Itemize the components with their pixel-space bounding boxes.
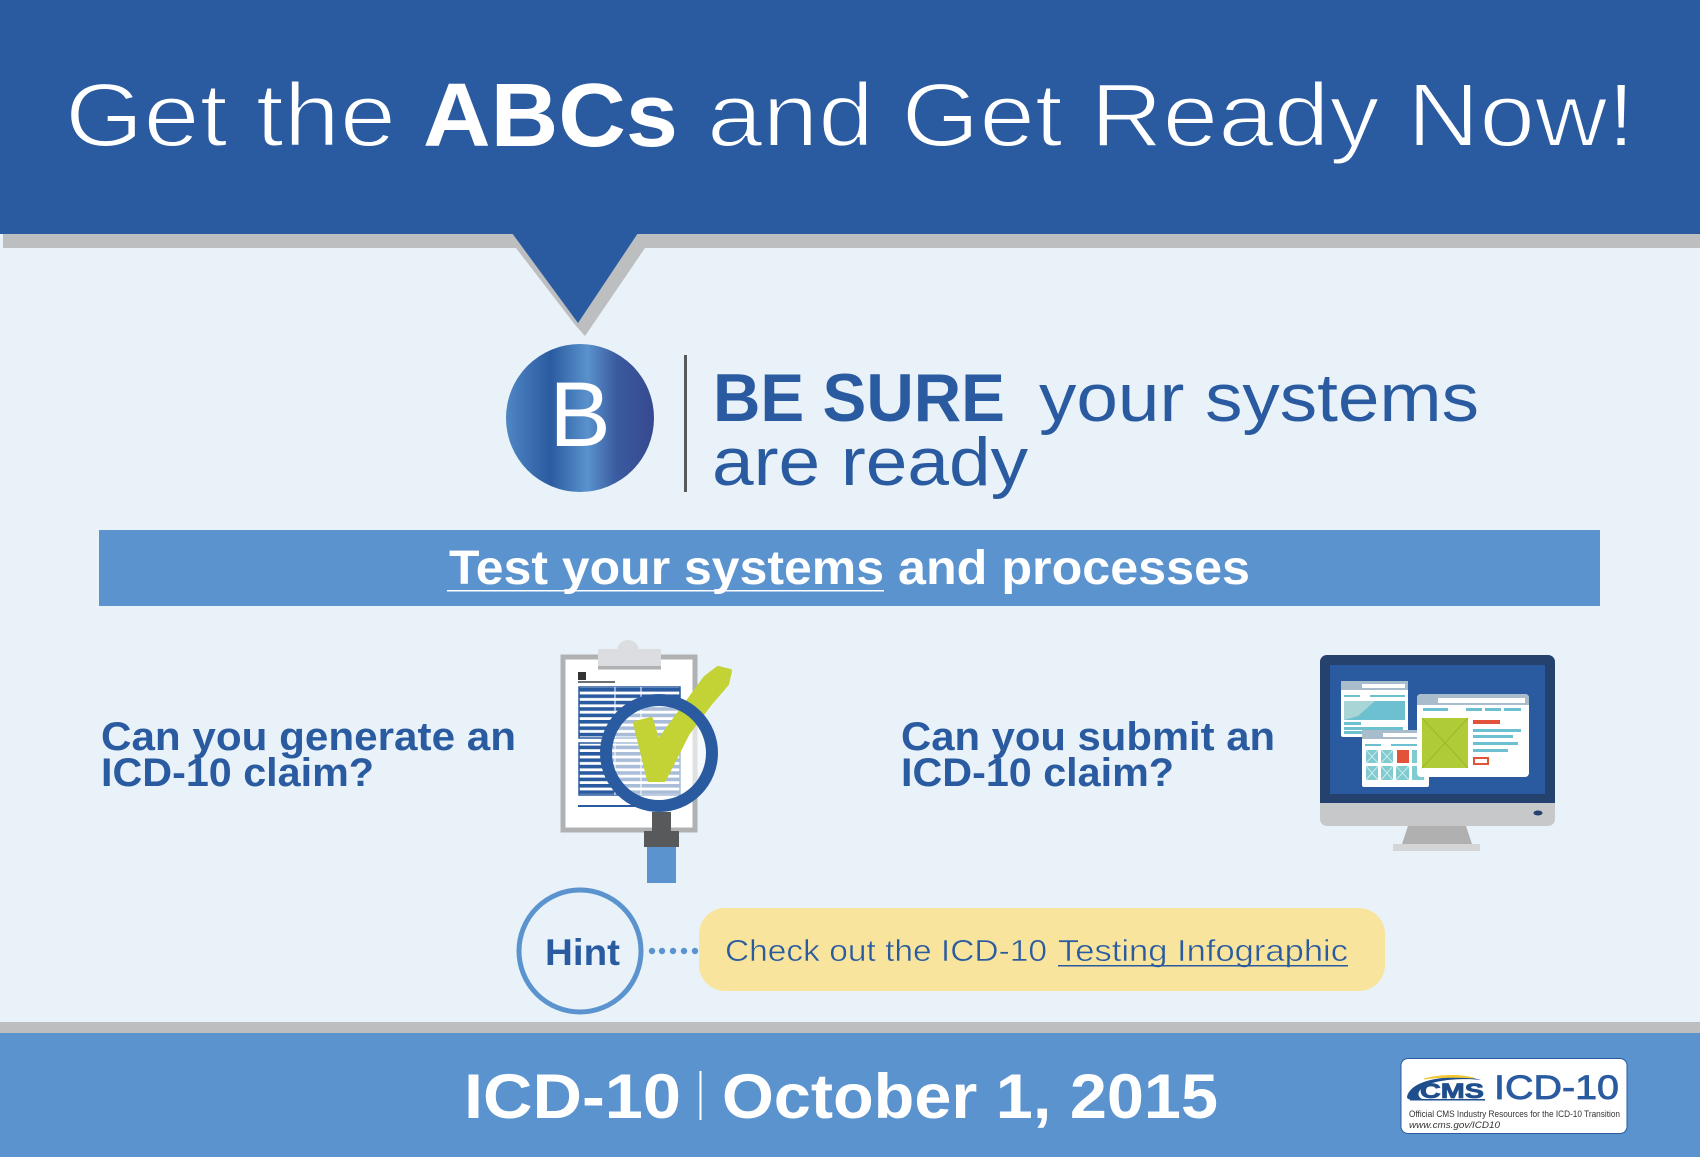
CMS ICD-10 logo: www.cms.gov/ICD10 bbox=[1409, 1120, 1500, 1130]
title: Get the bbox=[65, 66, 396, 166]
heading: be sure your systems are ready: are ready bbox=[712, 424, 1028, 500]
browser window three bbox=[1417, 694, 1529, 777]
hint callout bbox=[699, 908, 1385, 991]
heading: be sure your systems are ready: BE SURE bbox=[713, 360, 1005, 436]
title: and Get Ready Now! bbox=[707, 66, 1635, 166]
letter B badge bbox=[506, 344, 654, 492]
heading: be sure your systems are ready: your systems bbox=[1039, 360, 1479, 436]
divider line bbox=[684, 355, 687, 492]
test banner: and processes bbox=[898, 542, 1250, 595]
CMS ICD-10 logo bbox=[1401, 1058, 1627, 1134]
CMS ICD-10 logo: CMS bbox=[1420, 1080, 1484, 1103]
icon: clipboard with magnifier and check bbox=[563, 640, 730, 883]
hint callout: Testing Infographic bbox=[1058, 933, 1348, 968]
browser window one bbox=[1341, 681, 1408, 737]
footer date bbox=[464, 1062, 1218, 1132]
question: submit claim: Can you submit an bbox=[901, 715, 1275, 759]
title: ABCs bbox=[423, 66, 678, 166]
test banner bbox=[99, 530, 1600, 606]
header banner bbox=[0, 0, 1700, 336]
hint badge bbox=[519, 890, 641, 1012]
question: generate claim bbox=[101, 715, 516, 795]
footer banner bbox=[0, 1022, 1700, 1157]
test banner: Test your systems bbox=[449, 542, 884, 595]
question: submit claim bbox=[901, 715, 1275, 795]
hint callout: Check out the ICD-10 bbox=[725, 933, 1047, 968]
title bbox=[65, 66, 1635, 166]
dotted connector bbox=[649, 948, 698, 954]
icon: computer monitor bbox=[1320, 655, 1555, 851]
letter B badge: B bbox=[549, 364, 611, 466]
question: generate claim: Can you generate an bbox=[101, 715, 516, 759]
CMS ICD-10 logo: ICD-10 bbox=[1494, 1069, 1619, 1107]
CMS ICD-10 logo: Official CMS Industry Resources for the ICD-10 Transition bbox=[1409, 1109, 1620, 1119]
question: generate claim: ICD-10 claim? bbox=[101, 751, 374, 795]
footer date: ICD-10 bbox=[464, 1062, 681, 1132]
question: submit claim: ICD-10 claim? bbox=[901, 751, 1174, 795]
heading: be sure your systems are ready bbox=[712, 360, 1479, 500]
browser window two bbox=[1362, 730, 1429, 787]
hint badge: Hint bbox=[545, 932, 620, 973]
footer date: October 1, 2015 bbox=[722, 1062, 1218, 1132]
